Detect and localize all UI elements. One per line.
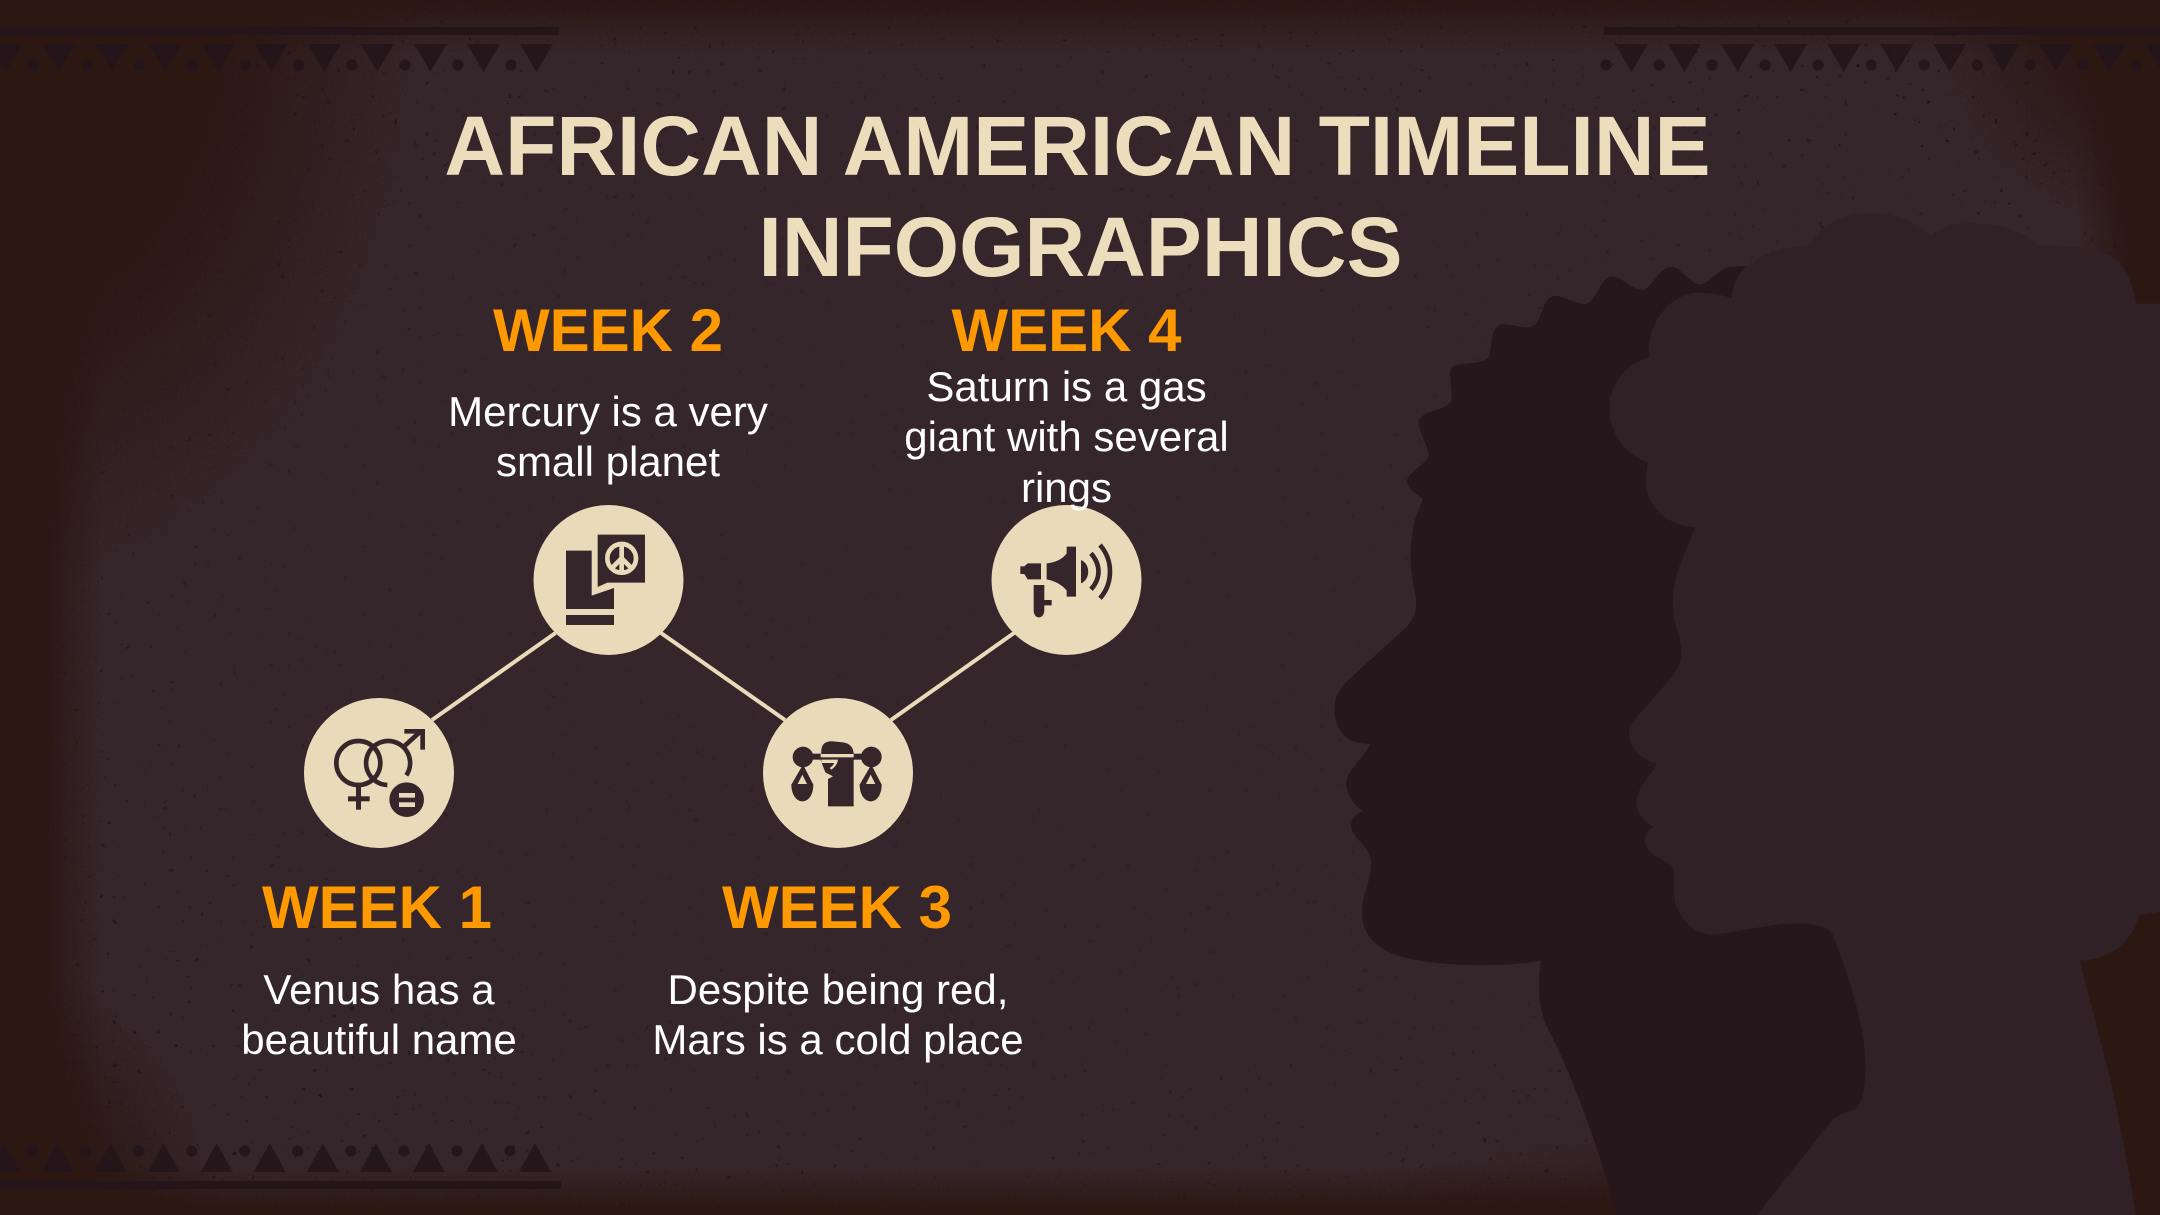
- icon: gender equality: [336, 731, 424, 817]
- text: week 4 description: Saturn is a gas: [926, 363, 1207, 410]
- text: week 2 description: Mercury is a very: [448, 388, 768, 435]
- week 2 text: [448, 297, 768, 485]
- text: week 3 description: [652, 966, 1024, 1063]
- text: week 4 description: giant with several: [904, 413, 1229, 460]
- node: week 2: [534, 505, 684, 655]
- silhouette: woman profile with afro: [1609, 213, 2160, 1215]
- week 1 text: [241, 874, 517, 1063]
- icon: blindfolded justice: [791, 741, 882, 806]
- node: week 4: [992, 505, 1142, 655]
- text: week 2 description: [448, 388, 768, 485]
- icon: peace message: [566, 535, 645, 625]
- heading: week 2: WEEK 2: [493, 297, 723, 364]
- week 4 text: [904, 297, 1229, 511]
- heading: week 1: WEEK 1: [262, 874, 492, 941]
- node: week 3: [763, 698, 913, 848]
- connector lines: [432, 633, 1014, 720]
- title: INFOGRAPHICS: [758, 200, 1403, 294]
- text: week 4 description: rings: [1021, 464, 1112, 511]
- title: [444, 99, 1711, 294]
- text: week 1 description: Venus has a: [263, 966, 495, 1012]
- text: week 2 description: small planet: [496, 438, 720, 485]
- heading: week 3: WEEK 3: [722, 874, 952, 941]
- text: week 3 description: Despite being red,: [668, 966, 1008, 1012]
- node: week 1: [304, 698, 454, 848]
- text: week 4 description: [904, 363, 1229, 511]
- text: week 1 description: beautiful name: [241, 1016, 517, 1063]
- title: AFRICAN AMERICAN TIMELINE: [444, 99, 1711, 193]
- icon: megaphone: [1020, 545, 1110, 617]
- silhouette: man profile: [1334, 265, 1953, 1215]
- text: week 1 description: [241, 966, 517, 1063]
- text: week 3 description: Mars is a cold place: [652, 1016, 1024, 1063]
- heading: week 4: WEEK 4: [951, 297, 1182, 364]
- week 3 text: [652, 874, 1024, 1063]
